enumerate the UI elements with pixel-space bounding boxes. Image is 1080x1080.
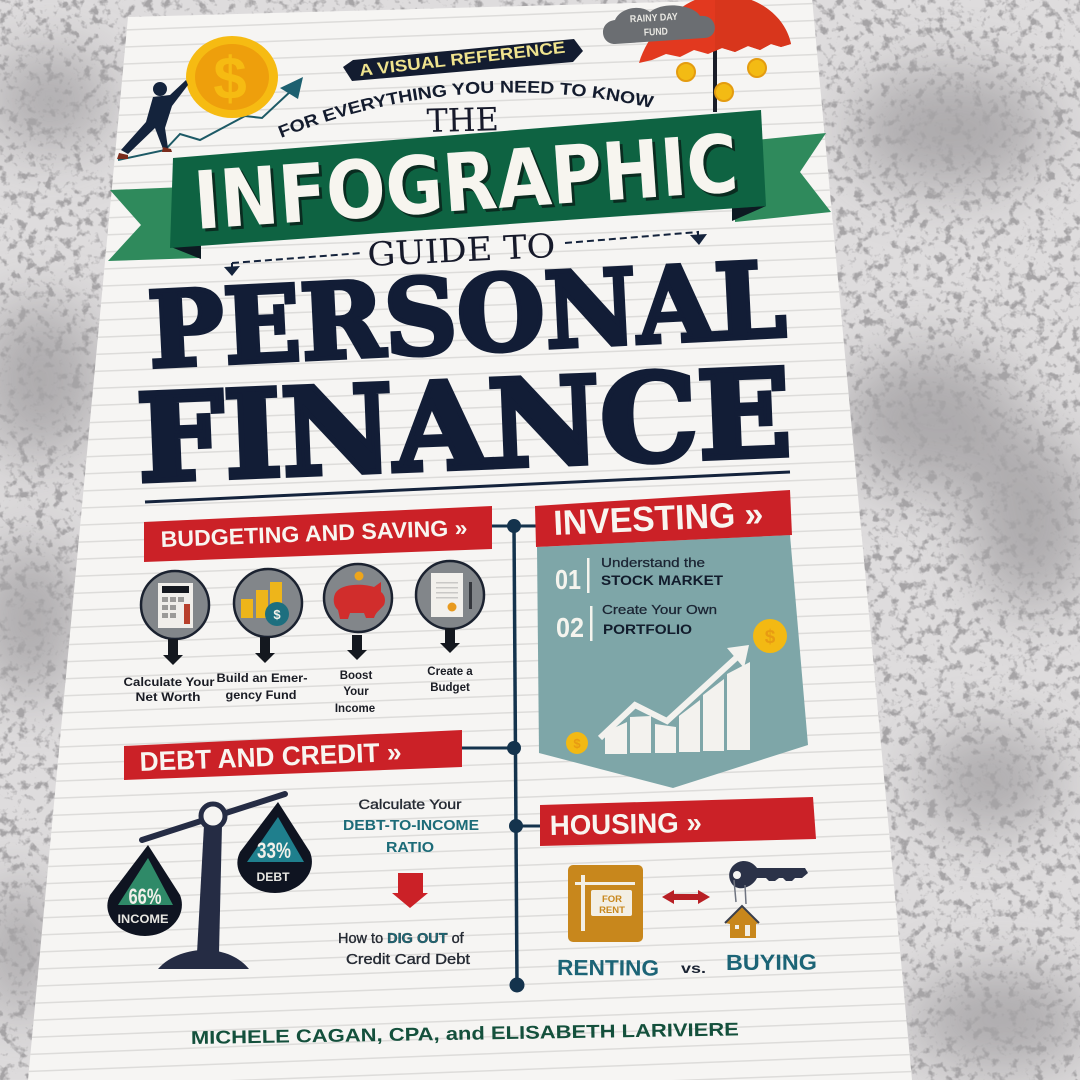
coin small <box>566 732 588 754</box>
rising zigzag line <box>118 77 303 160</box>
label: vs: vs. <box>681 961 706 976</box>
panel: investing <box>535 490 808 788</box>
arrow: red down <box>392 873 428 908</box>
guide to with dashed arrows: GUIDE TO <box>366 226 556 274</box>
gold coin <box>186 36 278 118</box>
rainy day cloud: RAINY DAY <box>630 12 678 25</box>
ribbon folds <box>171 206 766 259</box>
step 02: 02 <box>556 612 584 643</box>
text: dig out of credit card debt: Credit Card Debt <box>346 952 470 968</box>
icon labels: Income <box>335 703 375 715</box>
pushing man <box>117 80 188 159</box>
green ribbon banner with title <box>108 110 831 261</box>
right dashed arrow <box>565 232 707 245</box>
heading banner: BUDGETING AND SAVING » <box>160 515 468 552</box>
icon labels <box>124 666 473 715</box>
left pan: income 66%: INCOME <box>118 912 168 926</box>
step 01: STOCK MARKET <box>601 573 724 588</box>
rising bar chart with arrow <box>600 645 750 754</box>
text: debt to income ratio: RATIO <box>386 840 434 856</box>
badge: a visual reference <box>343 39 583 81</box>
heading banner: HOUSING » <box>549 807 702 841</box>
icon: balance scale <box>107 794 312 969</box>
icon: for rent sign: FOR <box>602 894 622 905</box>
arched subtitle: FOR EVERYTHING YOU NEED TO KNOW <box>278 80 654 138</box>
icon labels: Your <box>343 686 369 698</box>
label: renting: RENTING <box>557 955 659 981</box>
coin large: $ <box>765 627 776 648</box>
step 01: Understand the <box>601 556 705 570</box>
panel: debt and credit <box>107 730 479 969</box>
panel: budgeting and saving <box>124 506 492 715</box>
falling coins <box>677 59 766 101</box>
label: buying: BUYING <box>726 950 817 975</box>
arrow: double headed <box>662 890 710 904</box>
step 01 <box>555 556 724 595</box>
left dashed arrow <box>224 253 362 276</box>
step 02: PORTFOLIO <box>603 622 692 637</box>
heading banner <box>124 730 462 780</box>
icon: for rent sign: RENT <box>599 905 625 916</box>
text: debt to income ratio: DEBT-TO-INCOME <box>343 818 479 834</box>
ribbon tails <box>108 133 831 261</box>
right pan: debt 33% <box>237 802 312 893</box>
icon labels: gency Fund <box>226 690 296 702</box>
right pan: debt 33%: DEBT <box>256 870 290 884</box>
icon: for rent sign <box>568 865 643 942</box>
icon labels: Net Worth <box>136 692 200 704</box>
umbrella <box>639 0 791 112</box>
coin large <box>753 619 787 653</box>
text: debt to income ratio: Calculate Your <box>358 796 462 812</box>
icon labels: Calculate Your <box>124 677 215 689</box>
icon: coins and money bag <box>234 569 302 663</box>
icon labels: Boost <box>340 670 372 682</box>
gold coin: $ <box>213 45 247 112</box>
text: debt to income ratio <box>343 796 479 856</box>
icon: coins and money bag: $ <box>273 607 281 622</box>
text: dig out of credit card debt: How to DIG OUT of <box>338 931 465 947</box>
coin small: $ <box>573 736 581 751</box>
rainy day cloud: FUND <box>644 26 668 39</box>
step 02: Create Your Own <box>602 603 717 617</box>
title word: the: THE <box>426 100 499 140</box>
shield background <box>537 535 808 788</box>
text: dig out of credit card debt <box>338 931 470 968</box>
left pan: income 66% <box>107 845 182 936</box>
guide to with dashed arrows <box>224 226 707 276</box>
panel: housing <box>540 797 817 981</box>
title word: finance: FINANCE <box>135 343 794 510</box>
timeline connector <box>145 472 790 992</box>
icon labels: Budget <box>430 682 470 694</box>
step 01: 01 <box>555 564 581 595</box>
right pan: debt 33%: 33% <box>257 838 291 863</box>
heading banner: DEBT AND CREDIT » <box>139 737 402 777</box>
heading banner <box>144 506 492 562</box>
authors line: MICHELE CAGAN, CPA, and ELISABETH LARIVIERE <box>191 1018 739 1048</box>
icon labels: Create a <box>427 666 473 678</box>
rainy day cloud <box>603 5 715 44</box>
icon: man pushing coin up a rising arrow <box>117 36 303 160</box>
title word: personal: PERSONAL <box>145 238 788 392</box>
left pan: income 66%: 66% <box>128 884 162 909</box>
title word: infographic: INFOGRAPHIC <box>191 117 741 248</box>
step 02 <box>556 603 717 643</box>
title word: infographic: INFOGRAPHIC <box>194 120 744 251</box>
icon labels: Build an Emer- <box>216 673 308 685</box>
icon: key with house fob <box>725 861 808 938</box>
icon: umbrella with coins and rainy day cloud <box>603 0 791 112</box>
icon: budget document <box>416 561 484 653</box>
badge: a visual reference: A VISUAL REFERENCE <box>358 39 566 80</box>
icon: piggy bank <box>324 564 392 660</box>
ribbon main band <box>170 110 766 248</box>
heading banner: INVESTING » <box>553 495 764 543</box>
icon: calculator <box>141 571 209 665</box>
heading banner <box>540 797 816 846</box>
